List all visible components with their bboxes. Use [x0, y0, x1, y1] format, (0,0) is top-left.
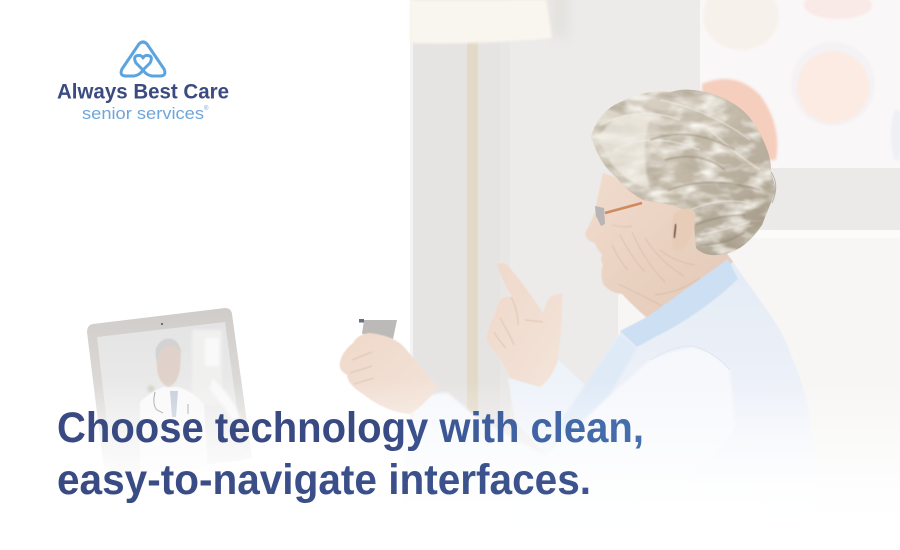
tablet showing doctor — [87, 308, 252, 476]
registered mark: ® — [204, 105, 209, 112]
collar — [620, 259, 738, 347]
senior woman — [413, 90, 804, 466]
raised forearm sleeve — [508, 360, 585, 455]
neck and face — [585, 173, 733, 318]
ear — [672, 208, 695, 252]
hand pointing finger — [487, 263, 562, 387]
headline: Choose technology with clean, — [57, 404, 644, 452]
logo: Always Best Care senior services — [57, 42, 229, 123]
headline: easy-to-navigate interfaces. — [57, 456, 591, 504]
logo wordmark: Always Best Care — [57, 80, 229, 104]
wall art with pastel circles — [700, 0, 900, 168]
shirt placket — [558, 334, 637, 440]
screen — [97, 322, 244, 476]
face wrinkles — [612, 225, 700, 306]
glasses — [595, 203, 642, 226]
lower sleeve across body — [400, 347, 735, 550]
hand holding device — [340, 319, 438, 414]
shirt torso — [500, 258, 815, 550]
shoulder seam — [650, 346, 730, 370]
hair — [591, 90, 776, 256]
stray hair curl — [771, 172, 776, 203]
floor lamp — [410, 0, 552, 438]
doctor — [140, 339, 208, 472]
logo icon: triangle with heart — [121, 42, 165, 76]
tablet frame — [87, 308, 252, 476]
camera dot — [161, 323, 163, 325]
device — [359, 319, 397, 339]
headline — [57, 404, 644, 504]
shelves in doctor's office — [148, 330, 240, 420]
hair strands — [600, 100, 760, 235]
bottom white fade over photo — [0, 380, 900, 550]
logo tagline: senior services — [82, 105, 204, 123]
